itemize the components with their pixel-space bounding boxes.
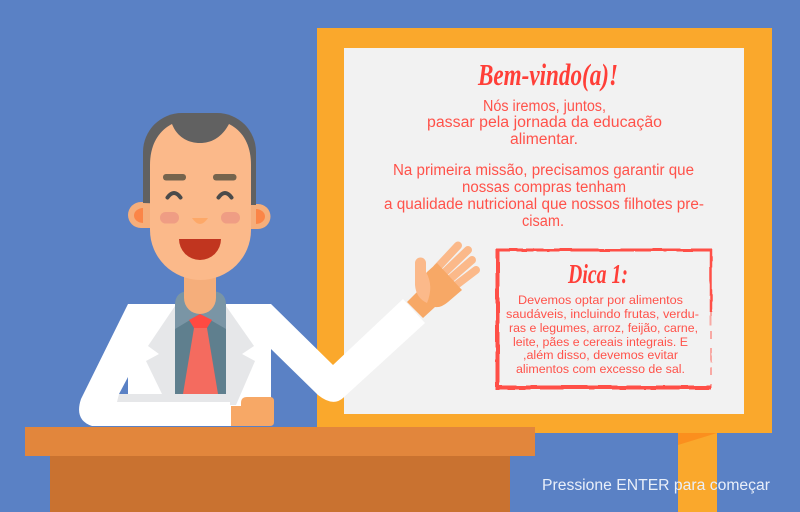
tip body: saudáveis, incluindo frutas, verdu- — [506, 307, 699, 321]
hand: waving — [407, 246, 476, 318]
coat hem shadow — [117, 394, 230, 402]
mission text: nossas compras tenham — [462, 179, 626, 196]
mission text: Na primeira missão, precisamos garantir que — [393, 162, 694, 179]
intro text — [427, 98, 662, 148]
tip box — [496, 249, 712, 390]
coat left arm inner gap — [119, 377, 128, 394]
ear right — [251, 204, 270, 229]
hair — [143, 113, 256, 205]
mission text: cisam. — [522, 213, 564, 230]
neck — [184, 272, 216, 314]
head — [128, 113, 270, 280]
coat — [79, 299, 425, 426]
tie — [183, 314, 218, 394]
nose — [192, 218, 208, 224]
intro text: passar pela jornada da educação — [427, 114, 662, 131]
tip body: Devemos optar por alimentos — [518, 293, 683, 307]
face — [150, 124, 251, 280]
desk — [25, 427, 535, 512]
mission text — [384, 162, 704, 230]
coat lapels — [146, 306, 255, 405]
tip body: alimentos com excesso de sal. — [516, 362, 685, 376]
cheeks — [160, 212, 240, 224]
forelock — [168, 118, 232, 143]
eyebrows — [163, 174, 236, 180]
board — [317, 28, 772, 512]
tip body — [506, 293, 699, 376]
tip body: ras e legumes, arroz, feijão, carne, — [509, 321, 698, 335]
intro text: alimentar. — [510, 131, 578, 148]
shirt — [175, 291, 226, 395]
prompt text: Pressione ENTER para começar — [542, 477, 770, 494]
fist — [231, 397, 274, 426]
doctor — [79, 113, 476, 426]
eyes — [168, 193, 232, 198]
rough red frame — [496, 249, 712, 390]
mouth — [179, 239, 221, 260]
tip body: ,além disso, devemos evitar — [523, 348, 678, 362]
ear left — [128, 202, 150, 228]
mission text: a qualidade nutricional que nossos filhotes pre- — [384, 196, 704, 213]
intro text: Nós iremos, juntos, — [483, 98, 606, 115]
tip body: leite, pães e cereais integrais. E — [513, 335, 688, 349]
tip heading: Dica 1: — [567, 259, 628, 289]
title: Bem-vindo(a)! — [477, 57, 618, 92]
